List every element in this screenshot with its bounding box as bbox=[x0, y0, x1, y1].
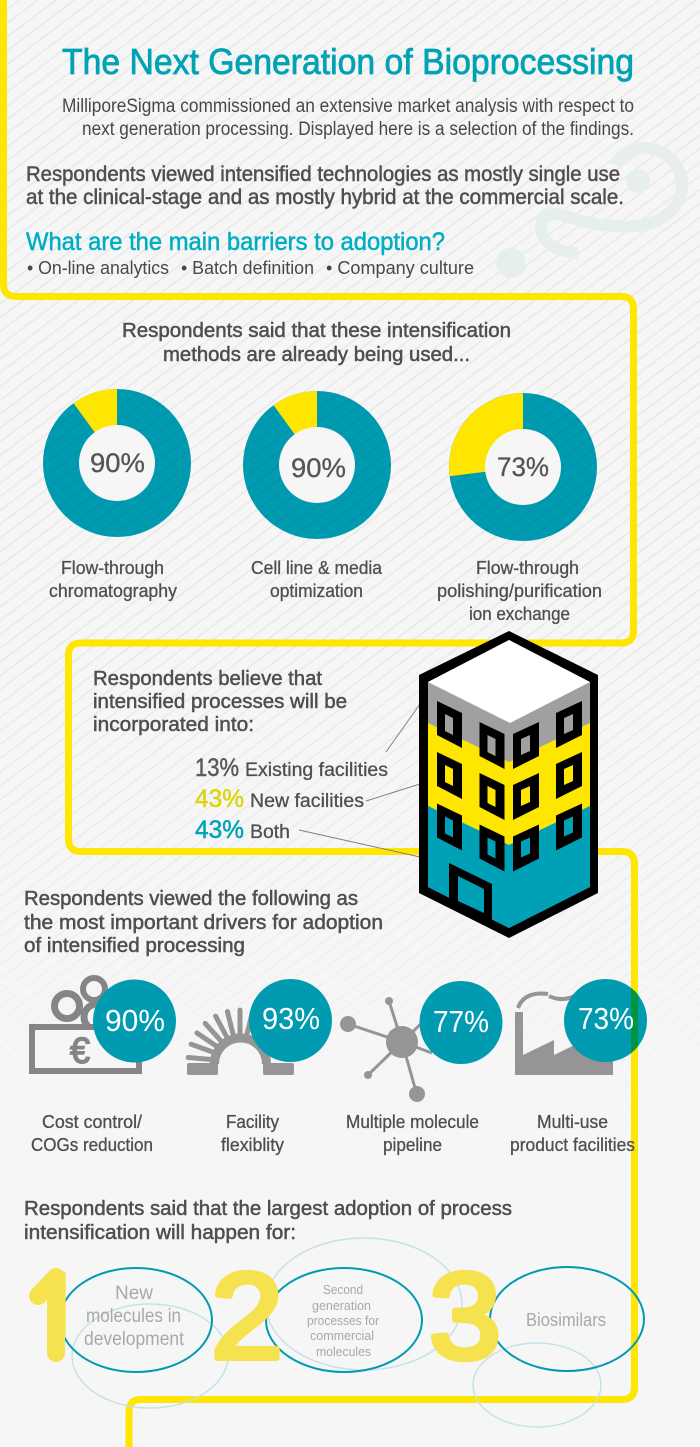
icon: building bbox=[419, 631, 598, 938]
heading: methods already used: methods are already being used... bbox=[163, 344, 470, 366]
rank 2: commercial bbox=[310, 1328, 374, 1343]
heading: drivers: the most important drivers for adoption bbox=[24, 912, 383, 934]
heading: methods already used bbox=[122, 320, 511, 366]
heading: drivers: Respondents viewed the following as bbox=[24, 888, 358, 910]
stat: facility flexibility bbox=[249, 979, 332, 1062]
stat: multi-use facilities: 73% bbox=[578, 1001, 634, 1036]
rank 3: Biosimilars bbox=[526, 1310, 606, 1330]
facility percentages: 43% bbox=[195, 816, 244, 844]
rank 1: development bbox=[84, 1329, 185, 1350]
rank 2: generation bbox=[312, 1298, 371, 1313]
heading: facilities: incorporated into: bbox=[93, 714, 254, 736]
heading: largest adoption: intensification will happen for: bbox=[24, 1222, 296, 1244]
icon: money and coins bbox=[32, 978, 139, 1071]
stat: multi-use facilities bbox=[564, 975, 647, 1067]
barriers list bbox=[27, 258, 474, 278]
heading: drivers bbox=[24, 888, 383, 957]
rank 2: molecules bbox=[316, 1344, 371, 1359]
donut chart: polishing ion exchange: 73% bbox=[497, 452, 549, 482]
stat: molecule pipeline: 77% bbox=[433, 1004, 489, 1039]
facility percentages bbox=[195, 754, 388, 844]
rank 1 bbox=[29, 1267, 213, 1373]
heading: largest adoption bbox=[24, 1198, 512, 1244]
rank 1: 1 bbox=[29, 1248, 85, 1384]
rank 1: New bbox=[115, 1283, 153, 1304]
driver labels: Multi-use bbox=[537, 1112, 608, 1132]
rank 2 bbox=[211, 1248, 422, 1384]
facility percentages: Both bbox=[250, 822, 290, 843]
donut chart: cell line and media: 90% bbox=[291, 453, 346, 483]
facility percentages: Existing facilities bbox=[245, 760, 388, 781]
decorative light ellipses bbox=[72, 1238, 601, 1427]
driver labels: Facility bbox=[226, 1112, 279, 1132]
donut chart: polishing ion exchange bbox=[449, 393, 597, 541]
heading: drivers: of intensified processing bbox=[24, 935, 245, 957]
intro paragraph: next generation processing. Displayed here is a selection of the findings. bbox=[82, 119, 634, 140]
barriers heading: What are the main barriers to adoption? bbox=[26, 228, 445, 256]
donut chart: cell line and media bbox=[243, 391, 391, 539]
icon: spring bbox=[187, 1010, 294, 1075]
donut labels bbox=[49, 558, 602, 624]
rank 3: 3 bbox=[429, 1248, 501, 1384]
barriers list: • Company culture bbox=[326, 258, 474, 278]
driver labels: flexiblity bbox=[221, 1135, 284, 1155]
key finding text: Respondents viewed intensified technologies as mostly single use bbox=[26, 163, 620, 186]
driver labels: product facilities bbox=[510, 1135, 635, 1155]
rank 1: molecules in bbox=[86, 1306, 181, 1327]
key finding text: at the clinical-stage and as mostly hybrid at the commercial scale. bbox=[26, 186, 624, 209]
donut chart: flow-through chromatography bbox=[43, 389, 191, 537]
donut labels: Flow-through bbox=[61, 558, 164, 578]
heading: facilities: Respondents believe that bbox=[93, 668, 322, 690]
driver labels: Cost control/ bbox=[42, 1112, 142, 1132]
facility percentages: 13% bbox=[195, 754, 239, 782]
heading: methods already used: Respondents said that these intensification bbox=[122, 320, 511, 342]
title: The Next Generation of Bioprocessing bbox=[62, 41, 634, 82]
barriers list: • On-line analytics bbox=[27, 258, 169, 278]
heading: facilities: intensified processes will be bbox=[93, 691, 347, 713]
donut labels: Flow-through bbox=[476, 558, 579, 578]
donut chart: flow-through chromatography: 90% bbox=[90, 448, 145, 478]
driver labels bbox=[31, 1112, 635, 1155]
stat: cost control: 90% bbox=[105, 1003, 165, 1038]
rank 2: processes for bbox=[307, 1313, 380, 1328]
leader lines bbox=[299, 704, 420, 857]
rank 2: Second bbox=[323, 1282, 363, 1297]
windows bbox=[437, 701, 582, 872]
facility percentages: New facilities bbox=[250, 791, 364, 812]
rank 3 bbox=[429, 1248, 644, 1384]
intro paragraph bbox=[62, 96, 634, 140]
facility percentages: 43% bbox=[195, 785, 244, 813]
donut labels: chromatography bbox=[49, 581, 177, 601]
icon: molecule bbox=[340, 997, 432, 1102]
key finding text bbox=[26, 163, 624, 209]
rank 2: 2 bbox=[211, 1248, 283, 1384]
donut labels: ion exchange bbox=[469, 604, 570, 624]
stat: molecule pipeline bbox=[420, 981, 502, 1064]
intro paragraph: MilliporeSigma commissioned an extensive market analysis with respect to bbox=[62, 96, 634, 117]
driver labels: pipeline bbox=[383, 1135, 442, 1155]
barriers list: • Batch definition bbox=[181, 258, 314, 278]
icon: factory bbox=[515, 994, 613, 1075]
door bbox=[449, 863, 492, 922]
stat: facility flexibility: 93% bbox=[262, 1001, 320, 1036]
donut labels: polishing/purification bbox=[437, 581, 602, 601]
stat: cost control bbox=[93, 980, 176, 1062]
donut labels: optimization bbox=[270, 581, 363, 601]
icon: money and coins: € bbox=[70, 1030, 90, 1071]
watermark swirl bbox=[496, 148, 682, 278]
heading: largest adoption: Respondents said that the largest adoption of process bbox=[24, 1198, 512, 1220]
heading: facilities bbox=[93, 668, 347, 736]
driver labels: Multiple molecule bbox=[346, 1112, 479, 1132]
donut labels: Cell line & media bbox=[251, 558, 383, 578]
driver labels: COGs reduction bbox=[31, 1135, 153, 1155]
